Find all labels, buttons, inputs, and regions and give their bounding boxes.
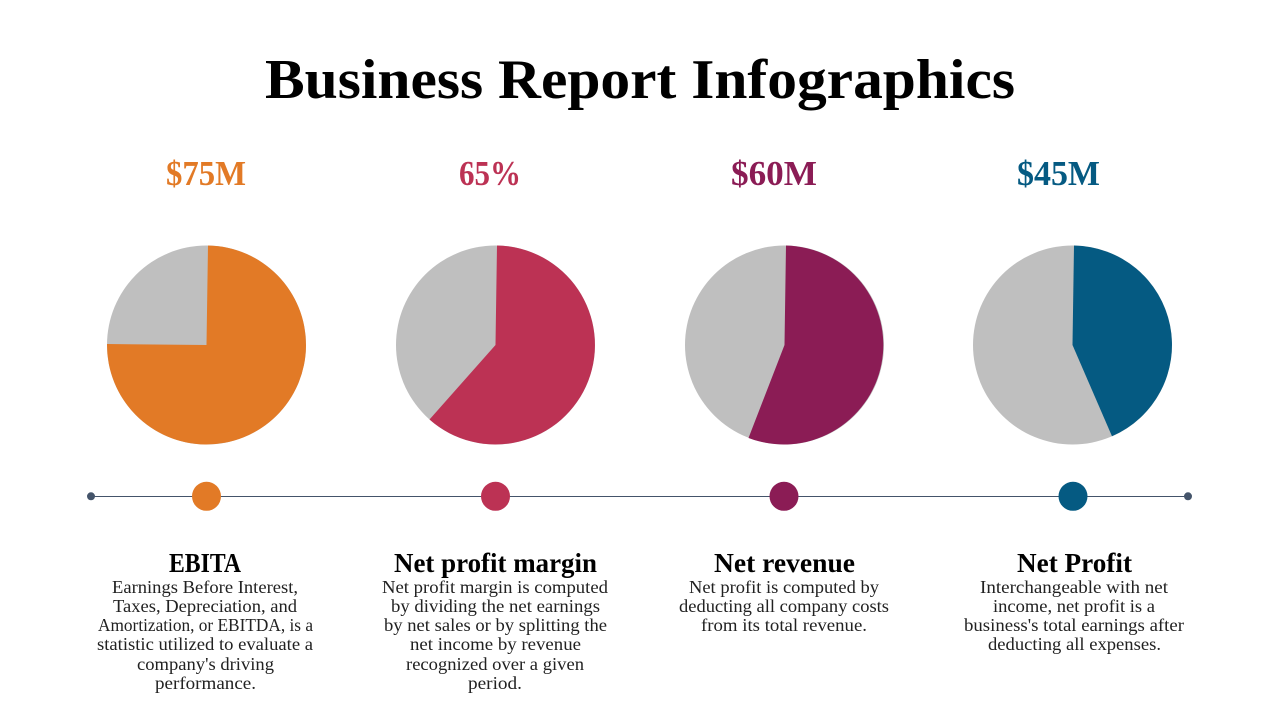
- text block: Net Profit description: [964, 577, 1184, 654]
- value: $75M: $75M: [166, 154, 246, 193]
- text block: Net Profit description: business's total earnings after: [964, 615, 1184, 635]
- text block: Net profit margin description: by dividing the net earnings: [391, 596, 600, 616]
- text block: Net revenue description: from its total revenue.: [701, 615, 867, 635]
- text block: Net profit margin description: recognized over a given: [406, 654, 584, 674]
- pie chart: Net revenue: [685, 246, 884, 444]
- pie chart: Net profit margin: [396, 246, 595, 444]
- text block: Net revenue description: deducting all company costs: [679, 596, 889, 616]
- text block: EBITA description: company's driving: [137, 654, 274, 674]
- text block: Net profit margin description: [382, 577, 608, 693]
- text block: Net profit margin description: net income by revenue: [410, 634, 581, 654]
- pie chart: Net Profit: [973, 246, 1172, 444]
- value: $60M: $60M: [731, 154, 817, 193]
- pie chart: EBITA: [107, 246, 306, 444]
- heading: EBITA: EBITA: [169, 548, 241, 578]
- text block: EBITA description: Taxes, Depreciation, and: [113, 596, 297, 616]
- heading: Net profit margin: Net profit margin: [394, 548, 597, 578]
- panel: Net Profit: [964, 154, 1184, 654]
- text block: Net profit margin description: by net sales or by splitting the: [384, 615, 607, 635]
- timeline: [87, 492, 1192, 500]
- timeline marker: EBITA: [192, 482, 221, 511]
- value: 65%: 65%: [459, 154, 521, 193]
- text block: Net Profit description: income, net profit is a: [993, 596, 1155, 616]
- text block: EBITA description: [97, 577, 313, 693]
- text block: EBITA description: Amortization, or EBITDA, is a: [98, 615, 313, 635]
- timeline marker: Net revenue: [770, 482, 798, 511]
- heading: Net Profit: Net Profit: [1017, 548, 1132, 578]
- text block: EBITA description: Earnings Before Interest,: [112, 577, 298, 597]
- heading: Net revenue: Net revenue: [714, 548, 855, 578]
- text block: Net Profit description: deducting all expenses.: [988, 634, 1161, 654]
- panel: EBITA: [97, 154, 313, 693]
- title: Business Report Infographics: [265, 49, 1015, 111]
- text block: Net revenue description: [679, 577, 889, 635]
- text block: EBITA description: performance.: [155, 673, 256, 693]
- panel: Net revenue: [679, 154, 889, 635]
- timeline marker: Net profit margin: [481, 482, 510, 511]
- panel: Net profit margin: [382, 154, 608, 693]
- timeline marker: Net Profit: [1058, 482, 1088, 511]
- text block: EBITA description: statistic utilized to evaluate a: [97, 634, 313, 654]
- value: $45M: $45M: [1017, 154, 1100, 193]
- text block: Net revenue description: Net profit is computed by: [689, 577, 879, 597]
- text block: Net profit margin description: Net profit margin is computed: [382, 577, 608, 597]
- text block: Net Profit description: Interchangeable with net: [980, 577, 1168, 597]
- text block: Net profit margin description: period.: [468, 673, 522, 693]
